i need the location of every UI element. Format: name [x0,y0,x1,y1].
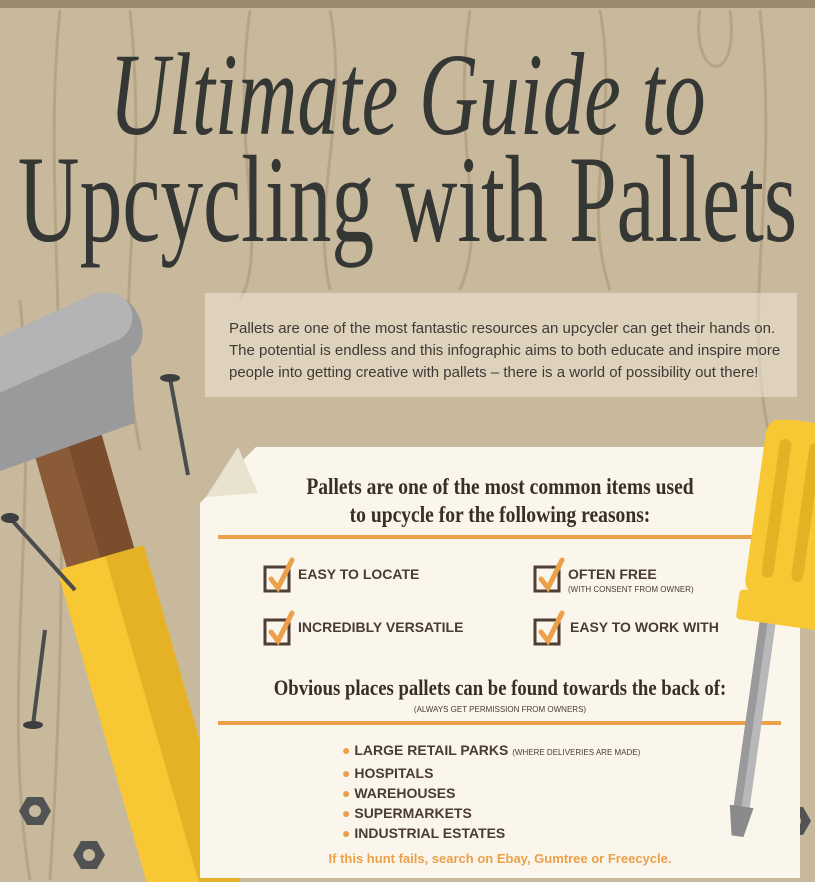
places list: ● HOSPITALS [342,765,433,781]
screwdriver [730,420,815,837]
checklist: OFTEN FREE [568,566,657,582]
intro text box: The potential is endless and this infographic aims to both educate and inspire more [229,342,780,359]
checklist: INCREDIBLY VERSATILE [298,619,463,635]
places list: ● LARGE RETAIL PARKS (WHERE DELIVERIES ARE MADE) [342,742,640,758]
heading: reasons: to upcycle for the following reasons: [350,502,650,527]
places list: ● SUPERMARKETS [342,805,472,821]
heading: reasons [306,474,694,527]
checklist: EASY TO LOCATE [298,566,419,582]
folded corner [200,447,258,503]
nuts [19,797,811,869]
title [18,40,797,268]
places list [342,742,640,841]
intro text box [205,293,797,397]
places list: ● INDUSTRIAL ESTATES [342,825,505,841]
footer note: If this hunt fails, search on Ebay, Gumtree or Freecycle. [329,851,671,866]
intro text box: Pallets are one of the most fantastic resources an upcycler can get their hands on. [229,320,775,337]
heading: places: Obvious places pallets can be found towards the back of: [274,675,726,700]
panel: reasons paper [200,447,800,878]
checklist: EASY TO WORK WITH [570,619,719,635]
checklist [264,558,719,646]
intro text box: people into getting creative with pallets – there is a world of possibility out there! [229,364,758,381]
panel: reasons paper: (ALWAYS GET PERMISSION FROM OWNERS) [414,705,586,714]
nails [1,374,190,729]
checklist: (WITH CONSENT FROM OWNER) [568,585,694,594]
heading: reasons: Pallets are one of the most common items used [306,474,694,499]
title: Upcycling with Pallets [18,131,797,268]
hammer [0,292,240,882]
places list: ● WAREHOUSES [342,785,455,801]
